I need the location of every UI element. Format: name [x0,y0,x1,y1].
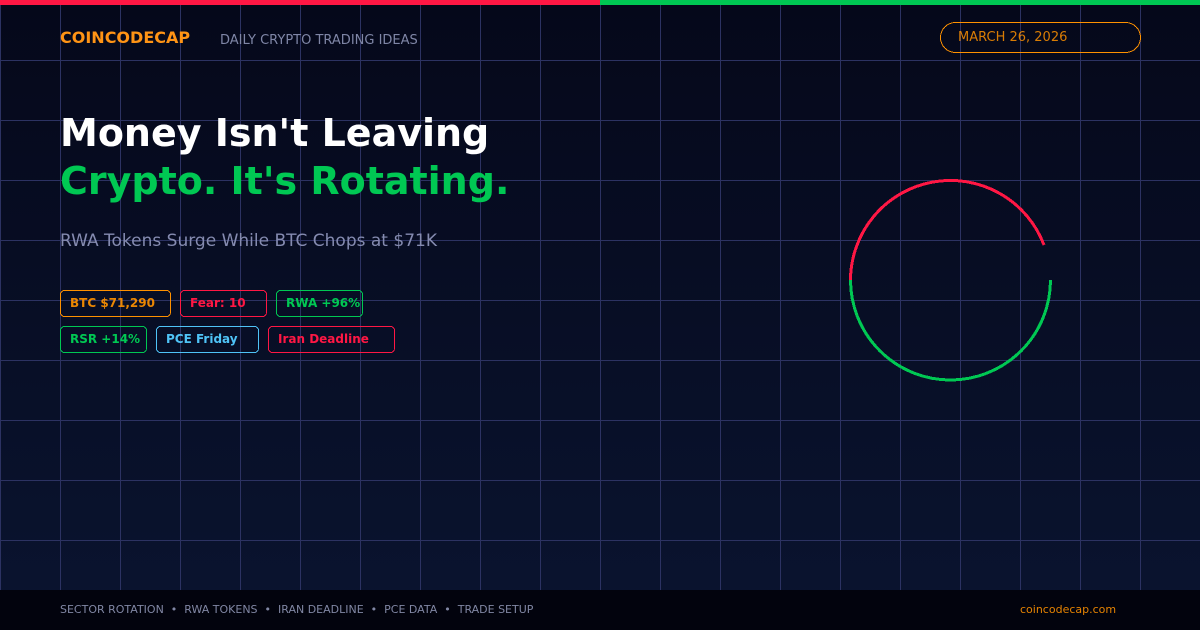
date pill [940,22,1140,52]
title: Money Isn't Leaving [60,111,489,155]
title [60,111,509,203]
chip: RSR gain: RSR +14% [70,332,140,346]
stat chips [60,290,394,352]
chip: RWA gain: RWA +96% [286,296,360,310]
chip: PCE: PCE Friday [166,332,238,346]
tagline: DAILY CRYPTO TRADING IDEAS [220,33,418,48]
rotation ring [850,180,1050,380]
chip: PCE [156,326,258,352]
footer bar [0,590,1200,630]
chip: RWA gain [276,290,362,316]
green arc [850,280,1050,380]
chip: fear index [180,290,266,316]
chip: Iran: Iran Deadline [278,332,369,346]
top accent bar [0,0,1200,5]
chip: RSR gain [60,326,146,352]
title: Crypto. It's Rotating. [60,159,509,203]
chip: BTC price: BTC $71,290 [70,296,155,310]
footer topics: SECTOR ROTATION • RWA TOKENS • IRAN DEADLINE • PCE DATA • TRADE SETUP [60,603,534,616]
chip: fear index: Fear: 10 [190,296,246,310]
subtitle: RWA Tokens Surge While BTC Chops at $71K [60,231,438,251]
red arc [850,180,1044,280]
brand name: COINCODECAP [60,28,190,47]
date pill: MARCH 26, 2026 [958,30,1067,45]
chip: Iran [268,326,394,352]
chip: BTC price [60,290,170,316]
footer site: coincodecap.com [1020,603,1116,616]
